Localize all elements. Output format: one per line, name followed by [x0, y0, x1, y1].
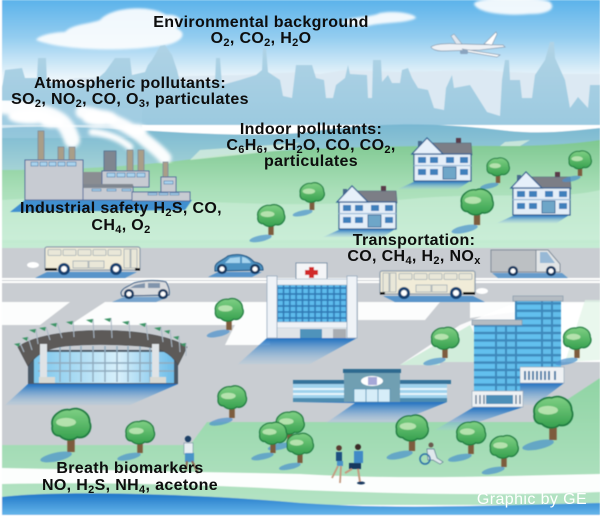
- label: industrial safety: [20, 200, 222, 236]
- label: industrial safety: CH: [91, 217, 115, 234]
- smoke plumes: [2, 106, 165, 158]
- label: transportation: CO, CH: [347, 248, 405, 265]
- label: environmental background: , H: [271, 30, 292, 47]
- label: indoor pollutants: [226, 121, 396, 170]
- label: industrial safety: 4: [115, 224, 122, 236]
- label: environmental background: 2: [223, 37, 230, 49]
- label: indoor pollutants: Indoor pollutants:: [240, 121, 382, 138]
- label: transportation: Transportation:: [353, 232, 475, 249]
- label: transportation: 4: [405, 255, 412, 267]
- house 1: [398, 138, 472, 189]
- plane: [431, 32, 505, 57]
- label: environmental background: [153, 14, 369, 49]
- label: indoor pollutants: , CH: [263, 137, 297, 154]
- label: industrial safety: 2: [144, 224, 151, 236]
- label: environmental background: O: [211, 30, 223, 47]
- skyline front layer: [2, 42, 600, 125]
- tower back: [490, 296, 564, 405]
- green hill: [2, 140, 600, 256]
- label: indoor pollutants: 2: [297, 144, 303, 156]
- label: breath biomarkers: NO, H: [42, 477, 88, 494]
- label: breath biomarkers: 2: [88, 484, 95, 496]
- label: indoor pollutants: particulates: [264, 153, 358, 170]
- label: environmental background: O: [299, 30, 311, 47]
- label: indoor pollutants: ,: [391, 137, 396, 154]
- house 2: [323, 186, 397, 237]
- truck: [491, 250, 568, 278]
- tower front: [435, 320, 523, 430]
- label: transportation: , NO: [440, 248, 474, 265]
- walking path: [2, 468, 600, 494]
- label: transportation: , H: [412, 248, 433, 265]
- label: indoor pollutants: O, CO, CO: [303, 137, 384, 154]
- road: [2, 248, 600, 304]
- trees: [39, 151, 591, 476]
- label: atmospheric pollutants: Atmospheric pollutants:: [34, 75, 226, 92]
- walker: [184, 436, 198, 473]
- lower lawn: [2, 378, 600, 505]
- joggers: [332, 444, 365, 484]
- label: industrial safety: 2: [165, 207, 172, 219]
- water: [2, 493, 600, 515]
- label: indoor pollutants: 6: [238, 144, 245, 156]
- label: indoor pollutants: 6: [257, 144, 263, 156]
- stadium: [5, 318, 187, 405]
- blue car: [208, 255, 263, 277]
- shopping mall: [293, 369, 451, 423]
- label: indoor pollutants: C: [226, 137, 238, 154]
- label: breath biomarkers: [42, 460, 218, 496]
- label: environmental background: 2: [264, 37, 271, 49]
- label: breath biomarkers: Breath biomarkers: [56, 460, 204, 477]
- white plazas: [2, 302, 600, 362]
- label: atmospheric pollutants: , particulates: [145, 91, 249, 108]
- label: atmospheric pollutants: [11, 75, 249, 110]
- label: atmospheric pollutants: , CO, O: [82, 91, 139, 108]
- lower district pavement: [2, 302, 600, 447]
- label: atmospheric pollutants: 2: [76, 98, 82, 110]
- factory: [10, 131, 192, 212]
- label: atmospheric pollutants: 2: [35, 98, 41, 110]
- label: transportation: 2: [433, 255, 440, 267]
- distant blue hills: [2, 124, 600, 175]
- house 3: [497, 172, 571, 223]
- label: atmospheric pollutants: SO: [11, 91, 35, 108]
- bus 2: [380, 271, 485, 302]
- label: breath biomarkers: S, NH: [95, 477, 139, 494]
- hospital: [238, 263, 357, 364]
- label: industrial safety: Industrial safety H: [20, 200, 165, 217]
- label: industrial safety: , O: [122, 217, 144, 234]
- skyline back layer: [2, 70, 600, 125]
- label: industrial safety: S, CO,: [172, 200, 222, 217]
- silver car: [112, 281, 169, 302]
- clouds: [36, 0, 552, 49]
- label: indoor pollutants: 2: [384, 144, 391, 156]
- exhaust: [27, 262, 488, 294]
- road white line: [2, 278, 600, 283]
- bus 1: [35, 247, 140, 278]
- label: breath biomarkers: , acetone: [146, 477, 218, 494]
- label: environmental background: Environmental background: [153, 14, 369, 31]
- label: environmental background: , CO: [230, 30, 264, 47]
- label: environmental background: 2: [292, 37, 299, 49]
- sky: [2, 0, 600, 125]
- credit: Graphic by GE: [477, 491, 587, 508]
- label: indoor pollutants: H: [245, 137, 257, 154]
- label: breath biomarkers: 4: [139, 484, 146, 496]
- label: atmospheric pollutants: , NO: [41, 91, 76, 108]
- label: transportation: [347, 232, 481, 267]
- label: transportation: x: [474, 255, 481, 267]
- wheelchair user: [420, 442, 443, 464]
- label: atmospheric pollutants: 3: [139, 98, 145, 110]
